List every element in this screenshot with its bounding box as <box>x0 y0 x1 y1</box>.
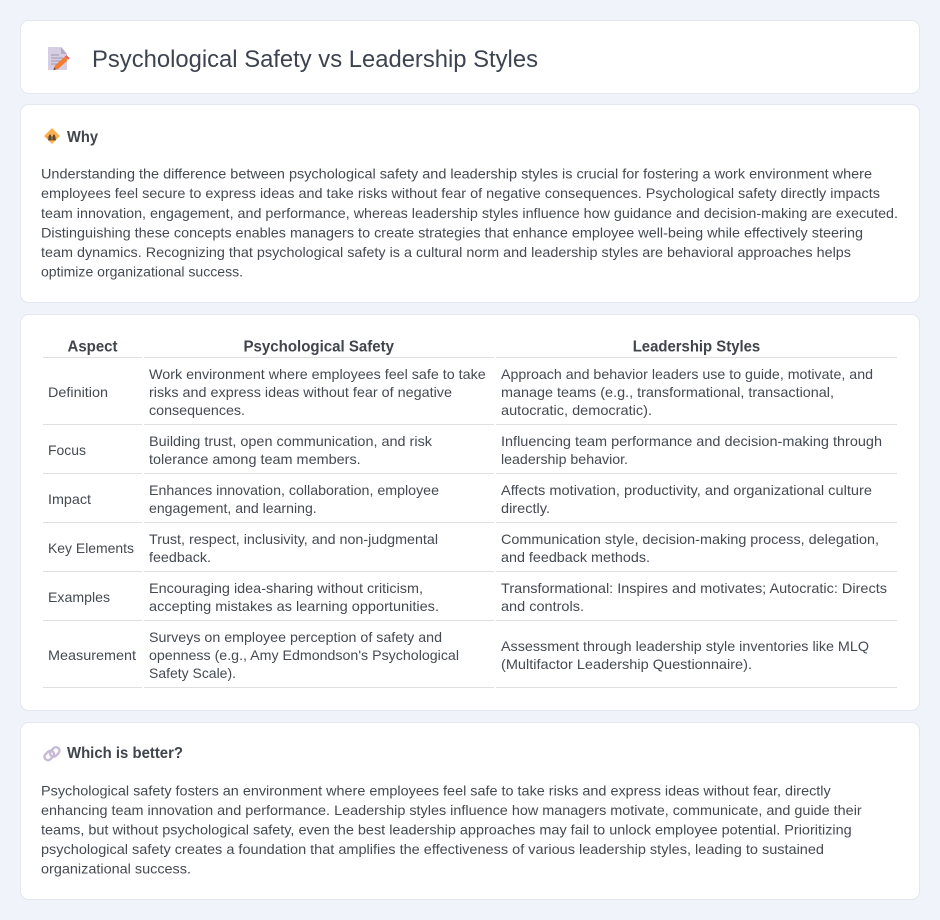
table row: impact: Enhances innovation, collaboration, employee <box>149 482 439 498</box>
table row: focus <box>43 433 897 474</box>
table row: examples: Encouraging idea-sharing without criticism, <box>149 580 423 596</box>
table row: definition: autocratic, democratic). <box>501 402 652 418</box>
table row: examples: and controls. <box>501 598 584 614</box>
heading: why: Why <box>67 129 98 146</box>
table row: definition: Definition <box>48 384 108 400</box>
text block: which is better paragraph <box>41 782 862 876</box>
table row: measurement: (Multifactor Leadership Questionnaire). <box>501 656 752 672</box>
panel: which is better <box>20 722 920 900</box>
table row: impact <box>43 482 897 522</box>
table row: key elements: Trust, respect, inclusivity, and non-judgmental <box>149 531 438 547</box>
table row: impact: Affects motivation, productivity, and organizational culture <box>501 482 872 498</box>
icon: chain link <box>43 746 61 762</box>
table row: definition: consequences. <box>149 402 245 418</box>
table row: focus: Focus <box>48 442 86 458</box>
panel: comparison table <box>20 314 920 710</box>
text block: why paragraph: team dynamics. Recognizing that psychological safety is a cultural norm and leadership styles are behavioral approaches helps <box>41 244 851 260</box>
text block: why paragraph: Understanding the difference between psychological safety and leadership styles is crucial for fostering a work environment where <box>41 166 872 182</box>
title: Psychological Safety vs Leadership Styles <box>92 46 538 73</box>
table header row: Aspect <box>68 338 118 356</box>
table header row: Psychological Safety <box>244 338 394 356</box>
text block: which is better paragraph: organizational success. <box>41 860 191 876</box>
text block: why paragraph: team innovation, engagement, and performance, whereas leadership styles influence how guidance and decision-making are executed. <box>41 205 898 221</box>
table row: examples: accepting mistakes as learning opportunities. <box>149 598 439 614</box>
table row: measurement: Measurement <box>48 647 136 663</box>
table row: definition: Work environment where employees feel safe to take <box>149 366 486 382</box>
table row: key elements: Communication style, decision-making process, delegation, <box>501 531 879 547</box>
table row: examples: Transformational: Inspires and motivates; Autocratic: Directs <box>501 580 887 596</box>
table row: focus: Building trust, open communication, and risk <box>149 433 433 449</box>
text block: which is better paragraph: psychological safety creates a foundation that amplifies the effectiveness of various leadership styles, leading to sustained <box>41 841 824 857</box>
table row: measurement <box>43 629 897 688</box>
table row: examples: Examples <box>48 589 110 605</box>
table row: examples <box>43 580 897 620</box>
heading: which is better: Which is better? <box>67 745 183 762</box>
panel: header <box>20 20 920 94</box>
table row: impact: directly. <box>501 500 550 516</box>
table row: impact: Impact <box>48 491 91 507</box>
table row: measurement: openness (e.g., Amy Edmondson's Psychological <box>149 647 459 663</box>
table row: focus: Influencing team performance and decision-making through <box>501 433 882 449</box>
icon: document with pencil <box>48 47 70 70</box>
text block: which is better paragraph: Psychological safety fosters an environment where employees feel safe to take risks and express ideas without fear, directly <box>41 782 831 798</box>
table header row: Leadership Styles <box>633 338 760 356</box>
text block: why paragraph <box>41 166 898 280</box>
panel: why <box>20 104 920 302</box>
table row: key elements <box>43 531 897 572</box>
table row: key elements: Key Elements <box>48 540 134 556</box>
table row: definition: risks and express ideas without fear of negative <box>149 384 452 400</box>
table row: focus: leadership behavior. <box>501 451 628 467</box>
table row: key elements: feedback. <box>149 549 211 565</box>
text block: why paragraph: employees feel secure to express ideas and take risks without fear of negative consequences. Psychological safety directly impacts <box>41 185 880 201</box>
table row: measurement: Surveys on employee perception of safety and <box>149 629 442 645</box>
table row: focus: tolerance among team members. <box>149 451 361 467</box>
table row: definition: Approach and behavior leaders use to guide, motivate, and <box>501 366 873 382</box>
table row: measurement: Safety Scale). <box>149 665 236 681</box>
text block: which is better paragraph: enhancing team innovation and performance. Leadership styles influence how managers motivate, communicate, and guide their <box>41 802 862 818</box>
table header row <box>43 338 897 358</box>
table row: key elements: and feedback methods. <box>501 549 650 565</box>
text block: why paragraph: optimize organizational success. <box>41 264 243 280</box>
table row: impact: engagement, and learning. <box>149 500 317 516</box>
text block: which is better paragraph: teams, but without psychological safety, even the best leadership approaches may fail to unlock employee potential. Prioritizing <box>41 822 852 838</box>
icon: diamond warning sign with people <box>44 128 60 144</box>
table row: measurement: Assessment through leadership style inventories like MLQ <box>501 638 869 654</box>
table row: definition: manage teams (e.g., transformational, transactional, <box>501 384 834 400</box>
table row: definition <box>43 366 897 424</box>
text block: why paragraph: Distinguishing these concepts enables managers to create strategies that enhance employee well-being while effectively steering <box>41 224 863 240</box>
